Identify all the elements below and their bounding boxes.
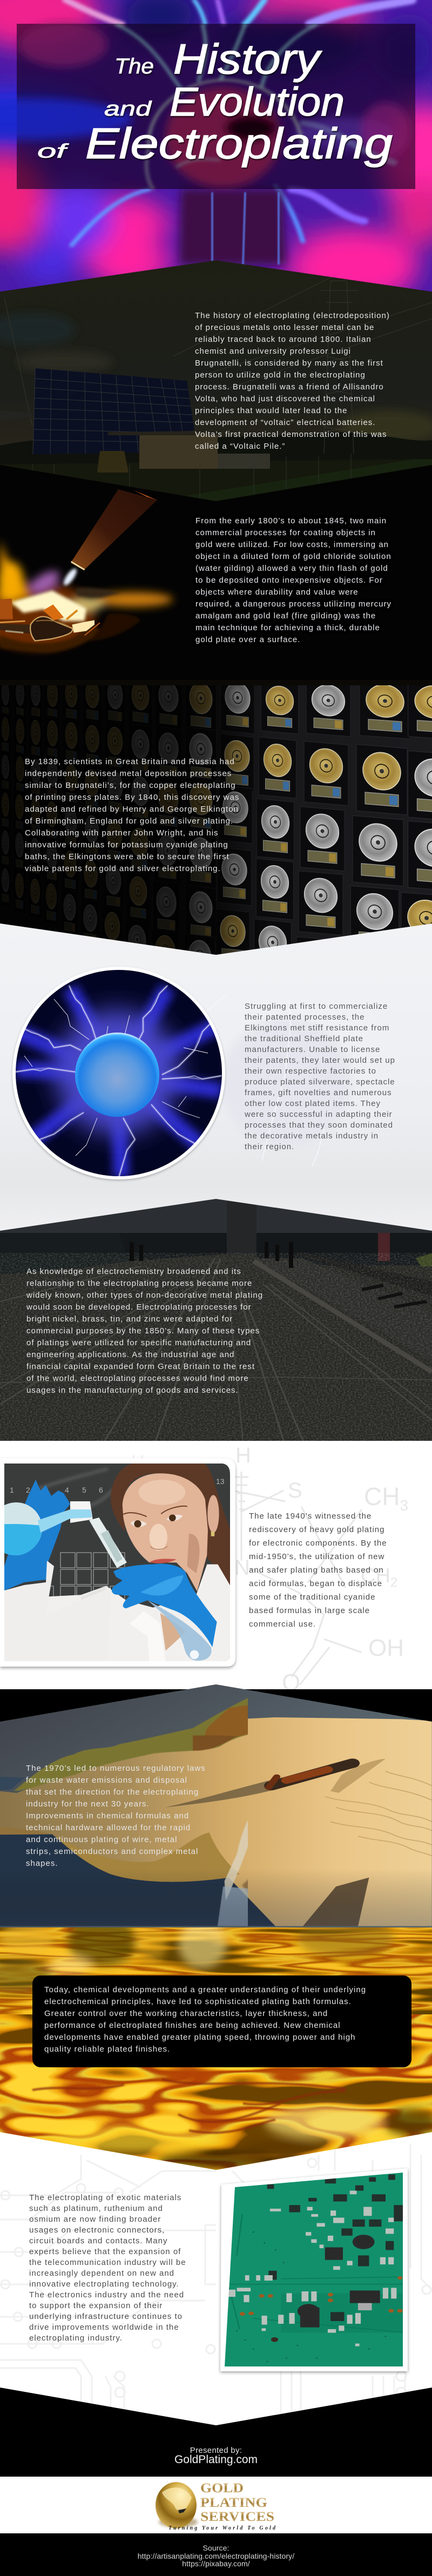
title: and xyxy=(104,98,153,120)
street with tram rails photo xyxy=(0,1199,432,1441)
text: history of electroplating: Volta’s first practical demonstration of this was xyxy=(195,430,387,439)
text: commercializing the patents: other low cost plated items. They xyxy=(245,1099,381,1108)
text: exotic materials: usages on electronic connectors, xyxy=(29,2226,165,2235)
faint molecule watermark: CH xyxy=(361,1565,390,1587)
text: 1970s regulations: technical hardware allowed for the rapid xyxy=(26,1823,191,1832)
photo: chemist with blue flask xyxy=(0,1458,238,1670)
text: non-decorative plating: commercial purposes by the 1850’s. Many of these types xyxy=(26,1326,260,1336)
text: history of electroplating: process. Brugnatelli was a friend of Allisandro xyxy=(195,382,384,392)
text: presented by: Presented by: xyxy=(190,2446,242,2455)
logo: Gold Plating Services: Turning Your World To Gold xyxy=(168,2525,276,2531)
photo: chemist with blue flask: 6 xyxy=(99,1486,103,1494)
text: modern chemical developments xyxy=(44,1984,366,2055)
text: commercializing the patents: produce plated silverware, spectacle xyxy=(245,1077,395,1087)
text: commercializing the patents: their own respective factories to xyxy=(245,1067,376,1076)
text: modern chemical developments: developments have enabled greater plating speed, throwing power and high xyxy=(44,2033,356,2042)
text: 1970s regulations: that set the direction for the electroplating xyxy=(26,1788,199,1797)
text: non-decorative plating: As knowledge of electrochemistry broadened and its xyxy=(26,1267,241,1276)
text: 1970s regulations xyxy=(26,1765,205,1867)
text: 1970s regulations: The 1970’s led to numerous regulatory laws xyxy=(26,1764,206,1773)
logo: Gold Plating Services: SERVICES xyxy=(200,2510,274,2524)
faint circuit trace pattern xyxy=(0,2144,432,2414)
text: 1970s regulations: shapes. xyxy=(26,1859,58,1868)
text: exotic materials: The electronics industry and the need xyxy=(29,2290,184,2299)
text: heavy gold plating rediscovery xyxy=(249,1512,387,1629)
text: GoldPlating.com: GoldPlating.com xyxy=(174,2453,258,2466)
text: heavy gold plating rediscovery: rediscovery of heavy gold plating xyxy=(249,1525,384,1534)
text: history of electroplating: of precious metals onto lesser metal can be xyxy=(195,323,374,332)
text: non-decorative plating: of the world, electroplating processes would find more xyxy=(26,1374,249,1383)
text: commercializing the patents: manufacturers. Unable to license xyxy=(245,1045,380,1054)
text: early commercial processes: (water gilding) allowed a very thin flash of gold xyxy=(195,564,388,573)
text: commercializing the patents: their patented processes, the xyxy=(245,1013,364,1022)
title: Evolution xyxy=(170,79,345,124)
text: 1970s regulations: Improvements in chemical formulas and xyxy=(26,1811,189,1820)
title dark panel xyxy=(17,24,415,189)
faint molecule watermark: OH xyxy=(368,1635,404,1661)
text: non-decorative plating: would soon be developed. Electroplating processes for xyxy=(26,1303,252,1312)
text: modern chemical developments: Greater control over the working characteristics, layer thickness, and xyxy=(44,2009,328,2018)
text: early commercial processes: gold were utilized. For low costs, immersing an xyxy=(195,540,389,549)
text: Elkington patents: innovative formulas for potassium cyanide plating xyxy=(25,840,228,849)
panel: gold records section xyxy=(0,681,432,955)
panel: torch section xyxy=(0,465,432,657)
text: history of electroplating xyxy=(195,312,389,449)
text: exotic materials xyxy=(29,2193,186,2344)
dune and pipe photo xyxy=(0,1684,432,1927)
text: exotic materials: increasingly dependent on new and xyxy=(29,2269,174,2278)
text: heavy gold plating rediscovery: based formulas in large scale xyxy=(249,1606,370,1615)
lower flask xyxy=(147,1600,212,1661)
text: early commercial processes: object in a diluted form of gold chloride solution xyxy=(195,552,392,561)
text: commercializing the patents: were so successful in adapting their xyxy=(245,1110,393,1119)
title: The xyxy=(114,55,154,78)
faint molecule watermark: H xyxy=(131,1452,145,1472)
text: heavy gold plating rediscovery: and safer plating baths based on xyxy=(249,1566,384,1575)
left glove xyxy=(4,1480,70,1590)
plasma globe background xyxy=(0,0,432,292)
torch and flame photo xyxy=(0,465,432,657)
flask xyxy=(4,1502,42,1547)
text: 1970s regulations: and continuous plating of wire, metal xyxy=(26,1835,177,1844)
text: modern chemical developments: electrochemical principles, have led to sophisticated plating bath formulas. xyxy=(44,1997,352,2006)
text: exotic materials: to support the expansion of their xyxy=(29,2301,163,2310)
text: commercializing the patents: their patents, they later would set up xyxy=(245,1056,395,1065)
face xyxy=(123,1473,208,1592)
text: Elkington patents xyxy=(25,757,239,873)
panel: plasma ball section xyxy=(0,923,432,1231)
callout: today black box xyxy=(32,1975,411,2067)
text: 1970s regulations: for waste water emissions and disposal xyxy=(26,1776,187,1785)
panel: solar farm section xyxy=(0,260,432,501)
text: commercializing the patents: their region. xyxy=(245,1142,294,1151)
text: early commercial processes: amalgam and gold leaf (fire gilding) was the xyxy=(195,611,376,621)
right glove xyxy=(112,1563,217,1647)
panel: plasma hero xyxy=(0,0,432,292)
text: non-decorative plating: financial capital expanded form Great Britain to the rest xyxy=(26,1362,255,1371)
photo: chemist with blue flask: 5 xyxy=(82,1486,86,1494)
text: exotic materials: experts believe that the expansion of xyxy=(29,2247,181,2256)
text: Elkington patents: independently devised metal deposition processes xyxy=(25,769,232,778)
text: history of electroplating: Volta, who had just discovered the chemical xyxy=(195,394,375,403)
text: non-decorative plating: bright nickel, brass, tin, and zinc were adapted for xyxy=(26,1314,233,1324)
text: exotic materials: the telecommunication industry will be xyxy=(29,2258,186,2267)
faint molecule watermark: N xyxy=(234,1556,250,1580)
text: modern chemical developments: quality reliable plated finishes. xyxy=(44,2045,170,2054)
text: commercializing the patents: the traditional Sheffield plate xyxy=(245,1034,363,1043)
text: non-decorative plating: usages in the manufacturing of goods and services. xyxy=(26,1386,239,1395)
text: heavy gold plating rediscovery: The late 1940’s witnessed the xyxy=(249,1512,372,1521)
photo: chemist with blue flask: 1 xyxy=(10,1486,14,1494)
text: modern chemical developments: Today, chemical developments and a greater understanding of their underlying xyxy=(44,1985,366,1994)
text: non-decorative plating: relationship to the electroplating process became more xyxy=(26,1279,252,1288)
photo: green circuit board xyxy=(218,2168,410,2375)
text: history of electroplating: principles that would later lead to the xyxy=(195,406,347,415)
faint molecule watermark: S xyxy=(288,1479,302,1502)
text: non-decorative plating: engineering applications. As the industrial age and xyxy=(26,1350,234,1359)
title: History xyxy=(173,35,322,83)
text: exotic materials: such as platinum, ruthenium and xyxy=(29,2204,163,2213)
text: history of electroplating: person to utilize gold in the electroplating xyxy=(195,370,366,380)
logo: Gold Plating Services: PLATING xyxy=(200,2496,267,2510)
logo: Gold Plating Services: GOLD xyxy=(200,2481,244,2496)
text: Elkington patents: By 1839, scientists in Great Britain and Russia had xyxy=(25,757,235,766)
text: exotic materials: electroplating industry. xyxy=(29,2334,123,2343)
panel: circuit board section xyxy=(0,2128,432,2430)
text: Elkington patents: Collaborating with partner John Wright, and his xyxy=(25,828,219,838)
text: history of electroplating: called a “Voltaic Pile.” xyxy=(195,442,285,451)
text: Elkington patents: adapted and refined by Henry and George Elkington xyxy=(25,805,239,814)
faint molecule watermark: CH xyxy=(364,1482,400,1510)
faint molecule watermark: H xyxy=(235,1444,251,1467)
text: history of electroplating: Brugnatelli, is considered by many as the first xyxy=(195,359,383,368)
text: Elkington patents: of Birmingham, England for gold and silver plating. xyxy=(25,817,233,826)
text: source links: https://pixabay.com/ xyxy=(182,2559,250,2568)
text: history of electroplating: The history of electroplating (electrodeposition) xyxy=(195,311,390,320)
text: heavy gold plating rediscovery: some of the traditional cyanide xyxy=(249,1593,375,1602)
text: 1970s regulations: industry for the next 30 years. xyxy=(26,1799,150,1809)
photo: chemist with blue flask: 2 xyxy=(26,1486,30,1494)
title xyxy=(37,35,394,170)
text: modern chemical developments: performance of electroplated finishes are being achieved. New chemical xyxy=(44,2021,341,2030)
text: source links: http://artisanplating.com/electroplating-history/ xyxy=(138,2552,294,2560)
text: commercializing the patents: processes that they soon dominated xyxy=(245,1121,393,1130)
faint molecule watermark: 3 xyxy=(400,1497,408,1514)
text: Elkington patents: of printing press plates. By 1840, this discovery was xyxy=(25,793,239,802)
pale storm background xyxy=(0,923,432,1231)
text: early commercial processes: required, a dangerous process utilizing mercury xyxy=(195,599,392,609)
panel: street section xyxy=(0,1199,432,1441)
title: Electroplating xyxy=(85,119,393,167)
panel: waste water section xyxy=(0,1684,432,1927)
logo: Gold Plating Services xyxy=(0,2477,432,2533)
panel: laboratory section xyxy=(0,1441,432,1689)
lab coat xyxy=(45,1565,231,1662)
panel: molten gold section xyxy=(0,1927,432,2170)
text: history of electroplating: reliably traced back to around 1800. Italian xyxy=(195,335,372,344)
text: exotic materials: The electroplating of exotic materials xyxy=(29,2193,181,2202)
text: commercializing the patents xyxy=(245,1003,394,1151)
text: early commercial processes: main technique for achieving a thick, durable xyxy=(195,623,380,632)
text: source links xyxy=(0,2544,432,2568)
icon: plasma lightning orb xyxy=(11,967,227,1182)
text: early commercial processes: to be deposited onto inexpensive objects. For xyxy=(195,576,383,585)
solar farm photo xyxy=(0,260,432,501)
photo: chemist with blue flask: 13 xyxy=(216,1477,225,1486)
text: non-decorative plating: of platings were utilized for specific manufacturing and xyxy=(26,1338,251,1347)
text: Elkington patents: baths, the Elkingtons were able to secure the first xyxy=(25,852,230,861)
text: heavy gold plating rediscovery: acid formulas, began to displace xyxy=(249,1579,382,1588)
text: exotic materials: drive improvements worldwide in the xyxy=(29,2323,179,2332)
text: commercializing the patents: the decorative metals industry in xyxy=(245,1131,379,1141)
photo: chemist with blue flask: 4 xyxy=(65,1486,69,1494)
text: commercializing the patents: frames, gift novelties and numerous xyxy=(245,1088,392,1097)
molten gold liquid texture xyxy=(0,1927,432,2170)
text: early commercial processes: objects where durability and value were xyxy=(195,588,359,597)
title: of xyxy=(37,140,70,162)
text: exotic materials: circuit boards and contacts. Many xyxy=(29,2236,167,2245)
text: Elkington patents: similar to Brugnateli’s, for the copper electroplating xyxy=(25,781,236,790)
test tube xyxy=(89,1518,127,1568)
faint molecule watermark: 2 xyxy=(390,1575,397,1590)
text: early commercial processes: gold plate over a surface. xyxy=(195,635,300,644)
text: early commercial processes: From the early 1800’s to about 1845, two main xyxy=(195,516,387,525)
text: exotic materials: osmium are now finding broader xyxy=(29,2215,161,2224)
text: Elkington patents: viable patents for gold and silver electroplating. xyxy=(25,864,221,873)
text: heavy gold plating rediscovery: for electronic components. By the xyxy=(249,1539,387,1548)
text: source links: Source: xyxy=(203,2544,229,2552)
text: history of electroplating: development of “voltaic” electrical batteries. xyxy=(195,418,375,427)
text: exotic materials: underlying infrastructure continues to xyxy=(29,2312,183,2321)
text: heavy gold plating rediscovery: commercial use. xyxy=(249,1620,316,1629)
text: non-decorative plating xyxy=(26,1267,263,1395)
text: history of electroplating: chemist and university professor Luigi xyxy=(195,347,351,356)
text: commercializing the patents: Elkingtons met stiff resistance from xyxy=(245,1023,389,1033)
text: 1970s regulations: strips, semiconductors and complex metal xyxy=(26,1847,198,1856)
text: non-decorative plating: widely known, other types of non-decorative metal plating xyxy=(26,1291,263,1300)
photo: chemist with blue flask: 3 xyxy=(42,1486,46,1494)
text: heavy gold plating rediscovery: mid-1950’s, the utilization of new xyxy=(249,1552,384,1561)
hair xyxy=(111,1464,231,1586)
panel: presented by footer xyxy=(0,2388,432,2576)
text: early commercial processes: commercial processes for coating objects in xyxy=(195,528,376,537)
faint molecule watermark xyxy=(131,1444,408,1689)
text: exotic materials: innovative electroplating technology. xyxy=(29,2280,179,2289)
panel: logo strip xyxy=(0,2477,432,2533)
wall of gold records xyxy=(0,681,432,955)
text: commercializing the patents: Struggling at first to commercialize xyxy=(245,1002,388,1011)
text: early commercial processes xyxy=(195,517,391,644)
